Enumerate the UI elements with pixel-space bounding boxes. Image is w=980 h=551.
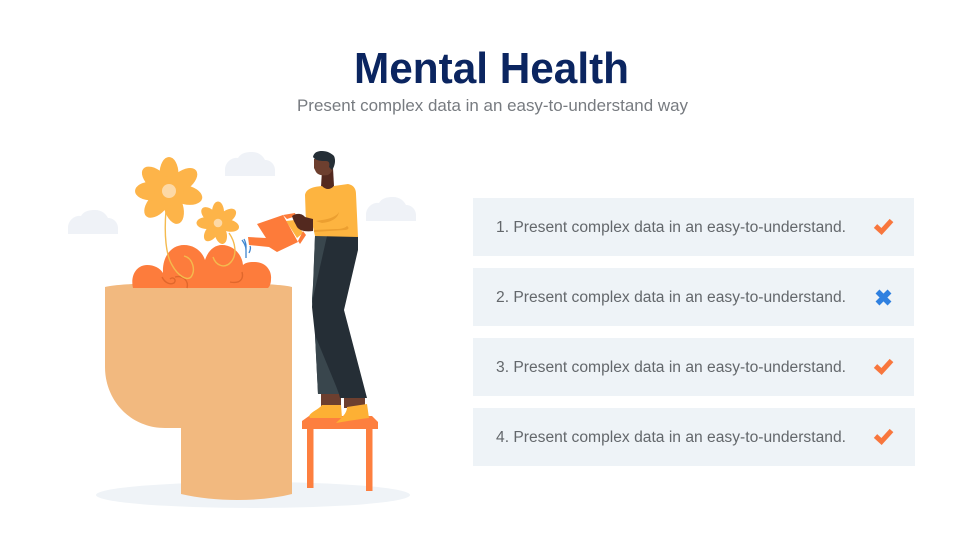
ground shadow	[96, 482, 410, 508]
icon: check	[876, 360, 892, 372]
trousers	[312, 236, 367, 398]
shirt	[305, 184, 358, 237]
icon: check	[876, 220, 892, 232]
row 2: 2. Present complex data in an easy-to-understand.	[496, 289, 846, 306]
face	[314, 158, 334, 175]
hair	[313, 151, 335, 170]
large flower	[135, 157, 204, 226]
row 1: 1. Present complex data in an easy-to-understand.	[496, 219, 846, 236]
panel: checklist	[473, 198, 915, 466]
row 1	[473, 198, 914, 256]
icon: cross	[878, 292, 890, 304]
cloud: top	[225, 152, 275, 176]
row 2	[473, 268, 914, 326]
subtitle: Present complex data in an easy-to-understand way	[297, 96, 688, 115]
ankles	[321, 393, 365, 408]
row 4	[473, 408, 915, 466]
water drops	[242, 239, 250, 258]
title: Mental Health	[354, 44, 629, 93]
row 4: 4. Present complex data in an easy-to-understand.	[496, 429, 846, 446]
neck	[321, 168, 334, 190]
icon: check	[876, 430, 892, 442]
head silhouette	[105, 282, 292, 500]
row 3	[473, 338, 914, 396]
cloud: right	[366, 197, 416, 221]
shoes	[309, 405, 342, 418]
cloud: left	[68, 210, 118, 234]
small flower	[196, 202, 240, 245]
watering can	[248, 213, 306, 252]
illustration: mental health	[68, 151, 416, 508]
row 3: 3. Present complex data in an easy-to-understand.	[496, 359, 846, 376]
brain	[132, 245, 271, 288]
hand and forearm	[292, 214, 313, 231]
stool	[302, 416, 378, 491]
flower stems	[165, 210, 235, 278]
person	[248, 151, 369, 423]
watering can handle	[286, 220, 303, 238]
